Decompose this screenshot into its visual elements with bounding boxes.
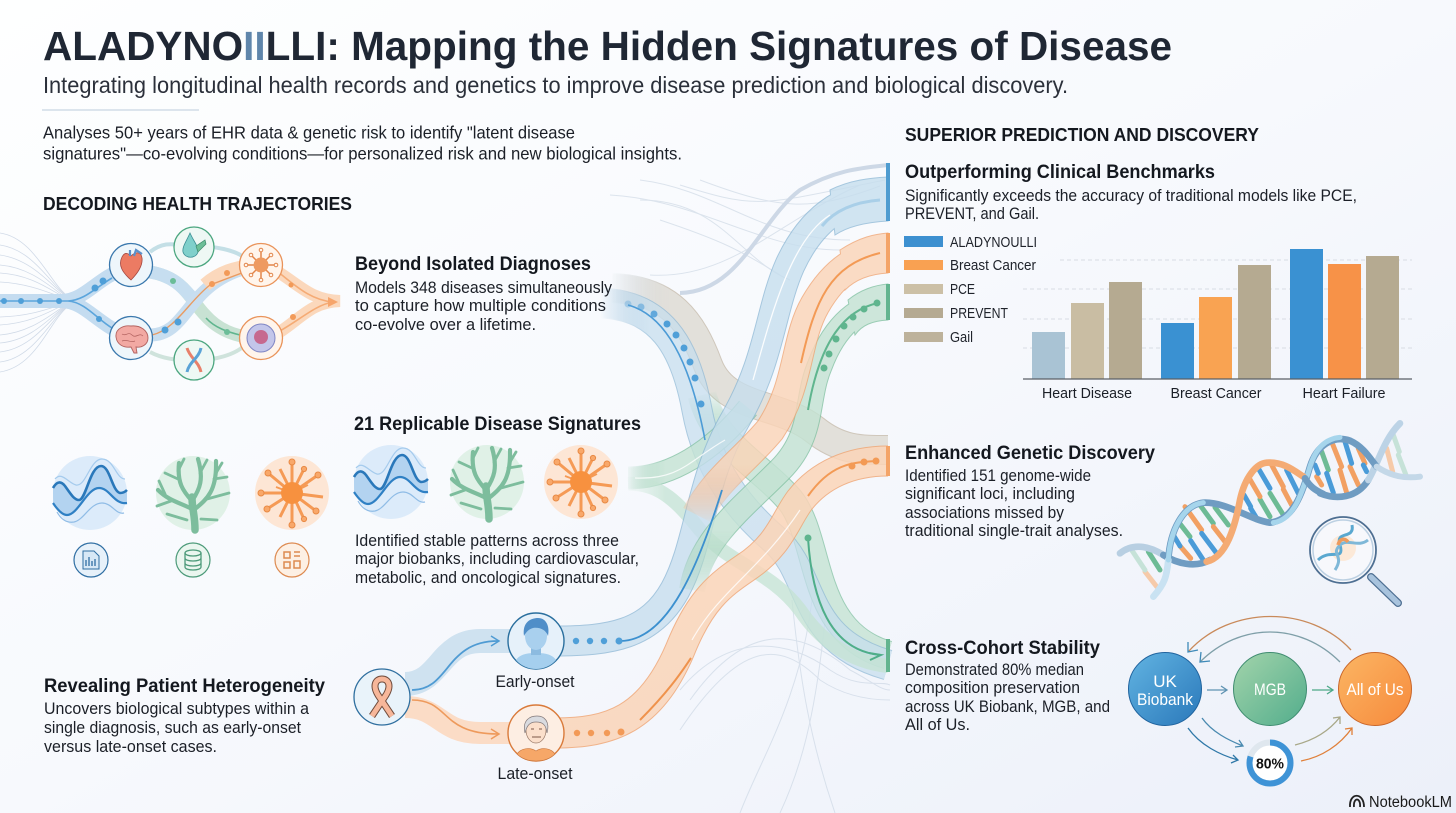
text: signatures description: metabolic, and oncological signatures. [355, 569, 621, 587]
fan of faint input lines [0, 233, 70, 372]
section text: enhanced genetic discovery: associations missed by [905, 504, 1065, 522]
intro text [43, 122, 682, 164]
section text: outperforming clinical benchmarks: PREVENT, and Gail. [905, 205, 1039, 223]
section text: revealing patient heterogeneity: versus late-onset cases. [44, 738, 217, 756]
icon row: signatures (right set) [354, 445, 618, 519]
section text: enhanced genetic discovery: Identified 151 genome-wide [905, 467, 1091, 485]
section text: cross-cohort stability: Cross-Cohort Stability [905, 637, 1100, 659]
node: All of Us [1338, 652, 1412, 726]
label: late-onset: Late-onset [498, 765, 573, 783]
node: MGB: MGB [1254, 680, 1286, 699]
section text: beyond isolated diagnoses: to capture how multiple conditions [355, 297, 606, 315]
intro text: signatures"—co-evolving conditions—for personalized risk and new biological insights. [43, 144, 682, 164]
section text: beyond isolated diagnoses: Beyond Isolated Diagnoses [355, 253, 591, 275]
flow accents: lines and dots on ribbons [621, 200, 881, 720]
node: UK Biobank: UK [1153, 672, 1177, 691]
section text: revealing patient heterogeneity: single diagnosis, such as early-onset [44, 719, 301, 737]
label: early-onset: Early-onset [496, 673, 575, 691]
bar chart: model accuracy by disease: Heart Failure [1302, 385, 1386, 402]
legend: Breast Cancer [950, 258, 1036, 274]
node: All of Us: All of Us [1346, 680, 1404, 699]
section text: beyond isolated diagnoses [355, 253, 613, 334]
icon: dna [174, 340, 214, 380]
section text: enhanced genetic discovery: Enhanced Genetic Discovery [905, 442, 1155, 464]
section text: outperforming clinical benchmarks: Outperforming Clinical Benchmarks [905, 161, 1215, 183]
flow ribbon: green from signature downward [628, 484, 888, 666]
illustration: dna helix [1120, 423, 1420, 597]
icon: magnifying glass over dna [1310, 517, 1398, 603]
icon: virus [240, 244, 282, 286]
icon: older patient [508, 705, 564, 761]
section text: outperforming clinical benchmarks: Significantly exceeds the accuracy of traditional models like PCE, [905, 187, 1357, 205]
flow ribbon: blue early-onset to benchmarks [555, 177, 888, 641]
icon row: signatures (left set) [53, 456, 329, 530]
icon: brain [110, 316, 152, 360]
section text: revealing patient heterogeneity: Uncovers biological subtypes within a [44, 700, 310, 718]
flow ribbon: grey to clinical benchmarks [680, 165, 888, 293]
text: signatures description [355, 532, 639, 587]
flow ribbon: green from signature upward [628, 408, 748, 478]
bar chart: model accuracy by disease: Breast Cancer [1170, 385, 1262, 402]
diagram: biobank cycle [1128, 616, 1412, 784]
flow lines: upper wisps [610, 180, 885, 280]
legend: PCE [950, 282, 975, 298]
section text: enhanced genetic discovery [905, 442, 1155, 540]
ribbon end bars [886, 163, 890, 672]
section text: revealing patient heterogeneity [44, 675, 325, 756]
title: ALADYNOIILLI: Mapping the Hidden Signatures of Disease [43, 23, 1172, 69]
icon: database [176, 543, 210, 577]
flow ribbon: green to prediction bar [692, 284, 888, 590]
icon: awareness ribbon [354, 669, 410, 725]
network ribbons [0, 244, 340, 361]
flow ribbon: beige to genetic discovery [612, 288, 888, 450]
section text: 21 replicable disease signatures: 21 Replicable Disease Signatures [354, 413, 641, 435]
section text: cross-cohort stability: across UK Biobank, MGB, and [905, 698, 1110, 716]
text: signatures description: major biobanks, including cardiovascular, [355, 550, 639, 568]
branching paths: early and late onset [405, 636, 530, 739]
legend: PREVENT [950, 306, 1008, 322]
flow ribbon: blue to cross-cohort [600, 303, 888, 665]
icon: data grid [275, 543, 309, 577]
node: UK Biobank: Biobank [1137, 690, 1193, 709]
section text: enhanced genetic discovery: significant loci, including [905, 485, 1075, 503]
text: signatures description: Identified stable patterns across three [355, 532, 619, 550]
heading: decoding health trajectories: DECODING HEALTH TRAJECTORIES [43, 194, 352, 214]
heading: superior prediction and discovery: SUPERIOR PREDICTION AND DISCOVERY [905, 125, 1259, 145]
node: MGB [1234, 652, 1306, 726]
node: UK Biobank [1128, 652, 1202, 726]
subtitle: Integrating longitudinal health records and genetics to improve disease prediction and biological discovery. [43, 72, 1068, 98]
logo: NotebookLM: NotebookLM [1369, 794, 1452, 811]
flow ribbon: orange to breast bar [697, 233, 888, 515]
section text: cross-cohort stability: composition preservation [905, 679, 1080, 697]
ring gauge: 80%: 80% [1256, 756, 1284, 772]
icon: young patient [508, 613, 564, 669]
intro text: Analyses 50+ years of EHR data & genetic risk to identify "latent disease [43, 122, 575, 142]
arrows between cohorts [1188, 616, 1352, 763]
flow lines: lower wisps [680, 600, 890, 813]
section text: outperforming clinical benchmarks [905, 161, 1357, 223]
section text: cross-cohort stability: All of Us. [905, 716, 970, 734]
icon: heart [110, 244, 152, 286]
legend: ALADYNOULLI [950, 235, 1037, 251]
section text: enhanced genetic discovery: traditional single-trait analyses. [905, 522, 1123, 540]
section text: beyond isolated diagnoses: co-evolve over a lifetime. [355, 316, 536, 334]
diagram: health trajectory network [0, 227, 340, 380]
icon: document chart [74, 543, 108, 577]
ring gauge: 80% [1250, 742, 1290, 784]
legend [904, 235, 1037, 346]
legend: Gail [950, 330, 973, 346]
section text: cross-cohort stability [905, 637, 1110, 734]
section text: revealing patient heterogeneity: Revealing Patient Heterogeneity [44, 675, 325, 697]
icon: water drop [174, 227, 214, 267]
section text: cross-cohort stability: Demonstrated 80% median [905, 661, 1084, 679]
section text: beyond isolated diagnoses: Models 348 diseases simultaneously [355, 279, 613, 297]
icon: cell [240, 316, 282, 360]
bar chart: model accuracy by disease [1023, 249, 1412, 402]
flow ribbon: orange late-onset to genetic discovery [555, 461, 888, 733]
flow ribbon: green to cross-cohort [702, 395, 888, 655]
bar chart: model accuracy by disease: Heart Disease [1042, 385, 1132, 402]
